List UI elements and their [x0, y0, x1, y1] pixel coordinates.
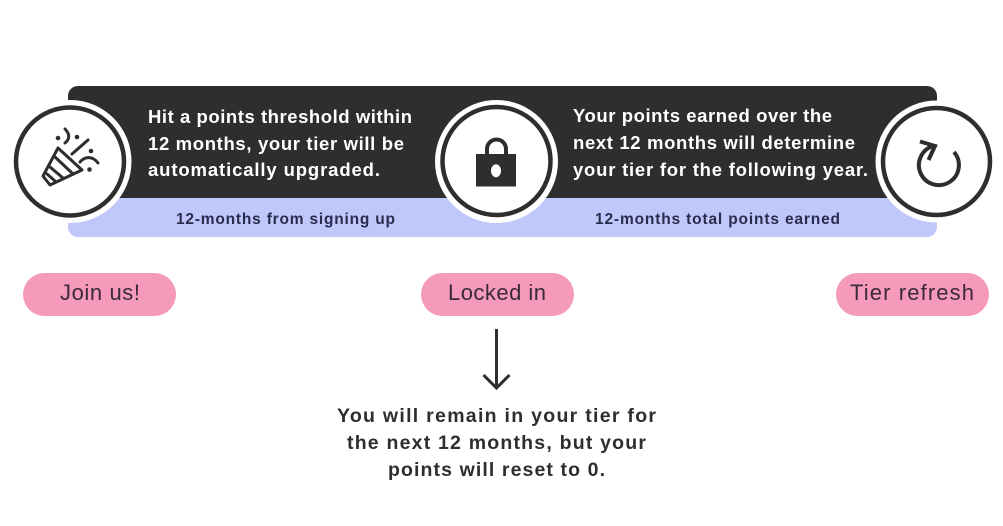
label: 12-months from signing up: 12-months from signing up	[176, 211, 395, 228]
pill: Locked in	[421, 273, 574, 316]
text: tier remains and points reset: points will reset to 0.	[388, 459, 605, 481]
arrow: down from Locked in	[484, 329, 510, 388]
pill: Tier refresh: Tier refresh	[850, 280, 974, 305]
text: threshold upgrade explanation: automatically upgraded.	[148, 159, 380, 180]
icon: refresh arrow	[876, 100, 998, 222]
pill: Join us!	[23, 273, 176, 316]
text: next 12 months explanation: Your points earned over the	[573, 105, 832, 126]
pill: Join us!: Join us!	[60, 280, 140, 305]
text: threshold upgrade explanation	[148, 106, 412, 180]
text: tier remains and points reset: You will remain in your tier for	[337, 405, 656, 427]
text: next 12 months explanation: next 12 months will determine	[573, 132, 855, 153]
text: next 12 months explanation: your tier for the following year.	[573, 159, 868, 180]
pill: Tier refresh	[836, 273, 989, 316]
icon: party popper	[8, 100, 132, 223]
timeline bar	[68, 86, 937, 237]
text: tier remains and points reset	[337, 405, 656, 481]
icon: padlock	[435, 100, 558, 223]
label: 12-months total points earned: 12-months total points earned	[595, 211, 840, 228]
text: threshold upgrade explanation: Hit a points threshold within	[148, 106, 412, 127]
text: next 12 months explanation	[573, 105, 868, 180]
text: threshold upgrade explanation: 12 months, your tier will be	[148, 133, 404, 154]
text: tier remains and points reset: the next 12 months, but your	[347, 432, 646, 454]
pill: Locked in: Locked in	[448, 280, 546, 305]
